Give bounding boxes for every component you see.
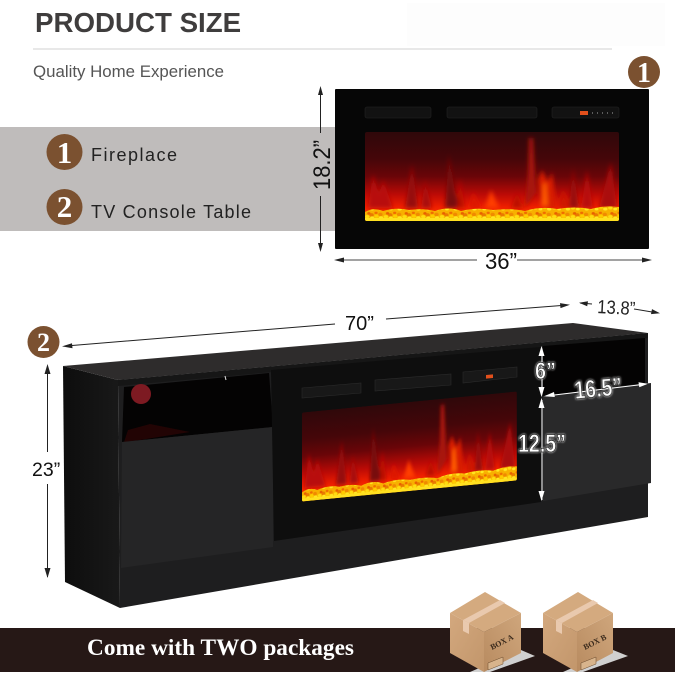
centre fireplace panel	[271, 347, 541, 541]
dimension: door height 12.5	[518, 398, 566, 501]
vents	[302, 367, 517, 398]
right door	[543, 383, 651, 501]
width dimension: fireplace 36	[334, 248, 652, 274]
fireplace unit	[335, 89, 649, 249]
legend item: tv console table	[46, 189, 251, 225]
icon: box B	[543, 592, 628, 672]
height dimension: fireplace 18.2: 18.2”	[309, 140, 336, 190]
legend item: tv console table: 2	[57, 189, 72, 224]
width dimension: console 70	[62, 303, 570, 348]
depth dimension: console 13.8: 13.8”	[597, 297, 636, 320]
legend item: fireplace: 1	[57, 135, 72, 170]
height dimension: console 23	[32, 364, 60, 578]
icon: box A	[450, 592, 535, 672]
width dimension: fireplace 36: 36”	[485, 248, 517, 274]
control display	[580, 111, 613, 115]
icon: box B: BOX B	[582, 632, 608, 652]
subtitle: Quality Home Experience	[33, 62, 224, 81]
legend item: fireplace: Fireplace	[91, 145, 177, 165]
console top surface	[63, 323, 648, 380]
title: PRODUCT SIZE	[35, 7, 241, 38]
right open shelf	[543, 338, 645, 396]
dimension: door height 12.5: 12.5”	[518, 430, 566, 458]
control display	[486, 374, 493, 379]
vents	[365, 107, 619, 118]
flame window	[302, 391, 517, 502]
console base and front	[118, 333, 648, 608]
badge 2: 2	[37, 328, 50, 357]
red decal	[131, 384, 151, 404]
icon: box A: BOX A	[489, 632, 515, 652]
width dimension: console 70: 70”	[345, 313, 374, 335]
badge 1: 1	[637, 58, 651, 89]
height dimension: console 23: 23”	[32, 459, 60, 481]
dimension: door width 16.5	[544, 373, 648, 405]
legend item: tv console table: TV Console Table	[91, 202, 251, 222]
tv console	[63, 323, 651, 608]
faint top-right box	[407, 3, 665, 46]
left door	[121, 427, 273, 568]
footer text: Come with TWO packages	[87, 635, 354, 661]
dimension: shelf height 6	[535, 346, 556, 397]
footer band	[0, 628, 675, 672]
depth dimension: console 13.8	[579, 297, 660, 320]
flame window	[365, 132, 619, 221]
dimension: shelf height 6: 6”	[535, 358, 556, 385]
legend item: fireplace	[46, 134, 177, 170]
console left side	[63, 366, 120, 608]
badge 2	[28, 326, 60, 358]
panel: legend band	[0, 127, 335, 231]
left open shelf	[122, 373, 273, 442]
dimension: door width 16.5: 16.5”	[573, 373, 623, 405]
height dimension: fireplace 18.2	[309, 86, 336, 252]
badge 1	[628, 56, 660, 89]
